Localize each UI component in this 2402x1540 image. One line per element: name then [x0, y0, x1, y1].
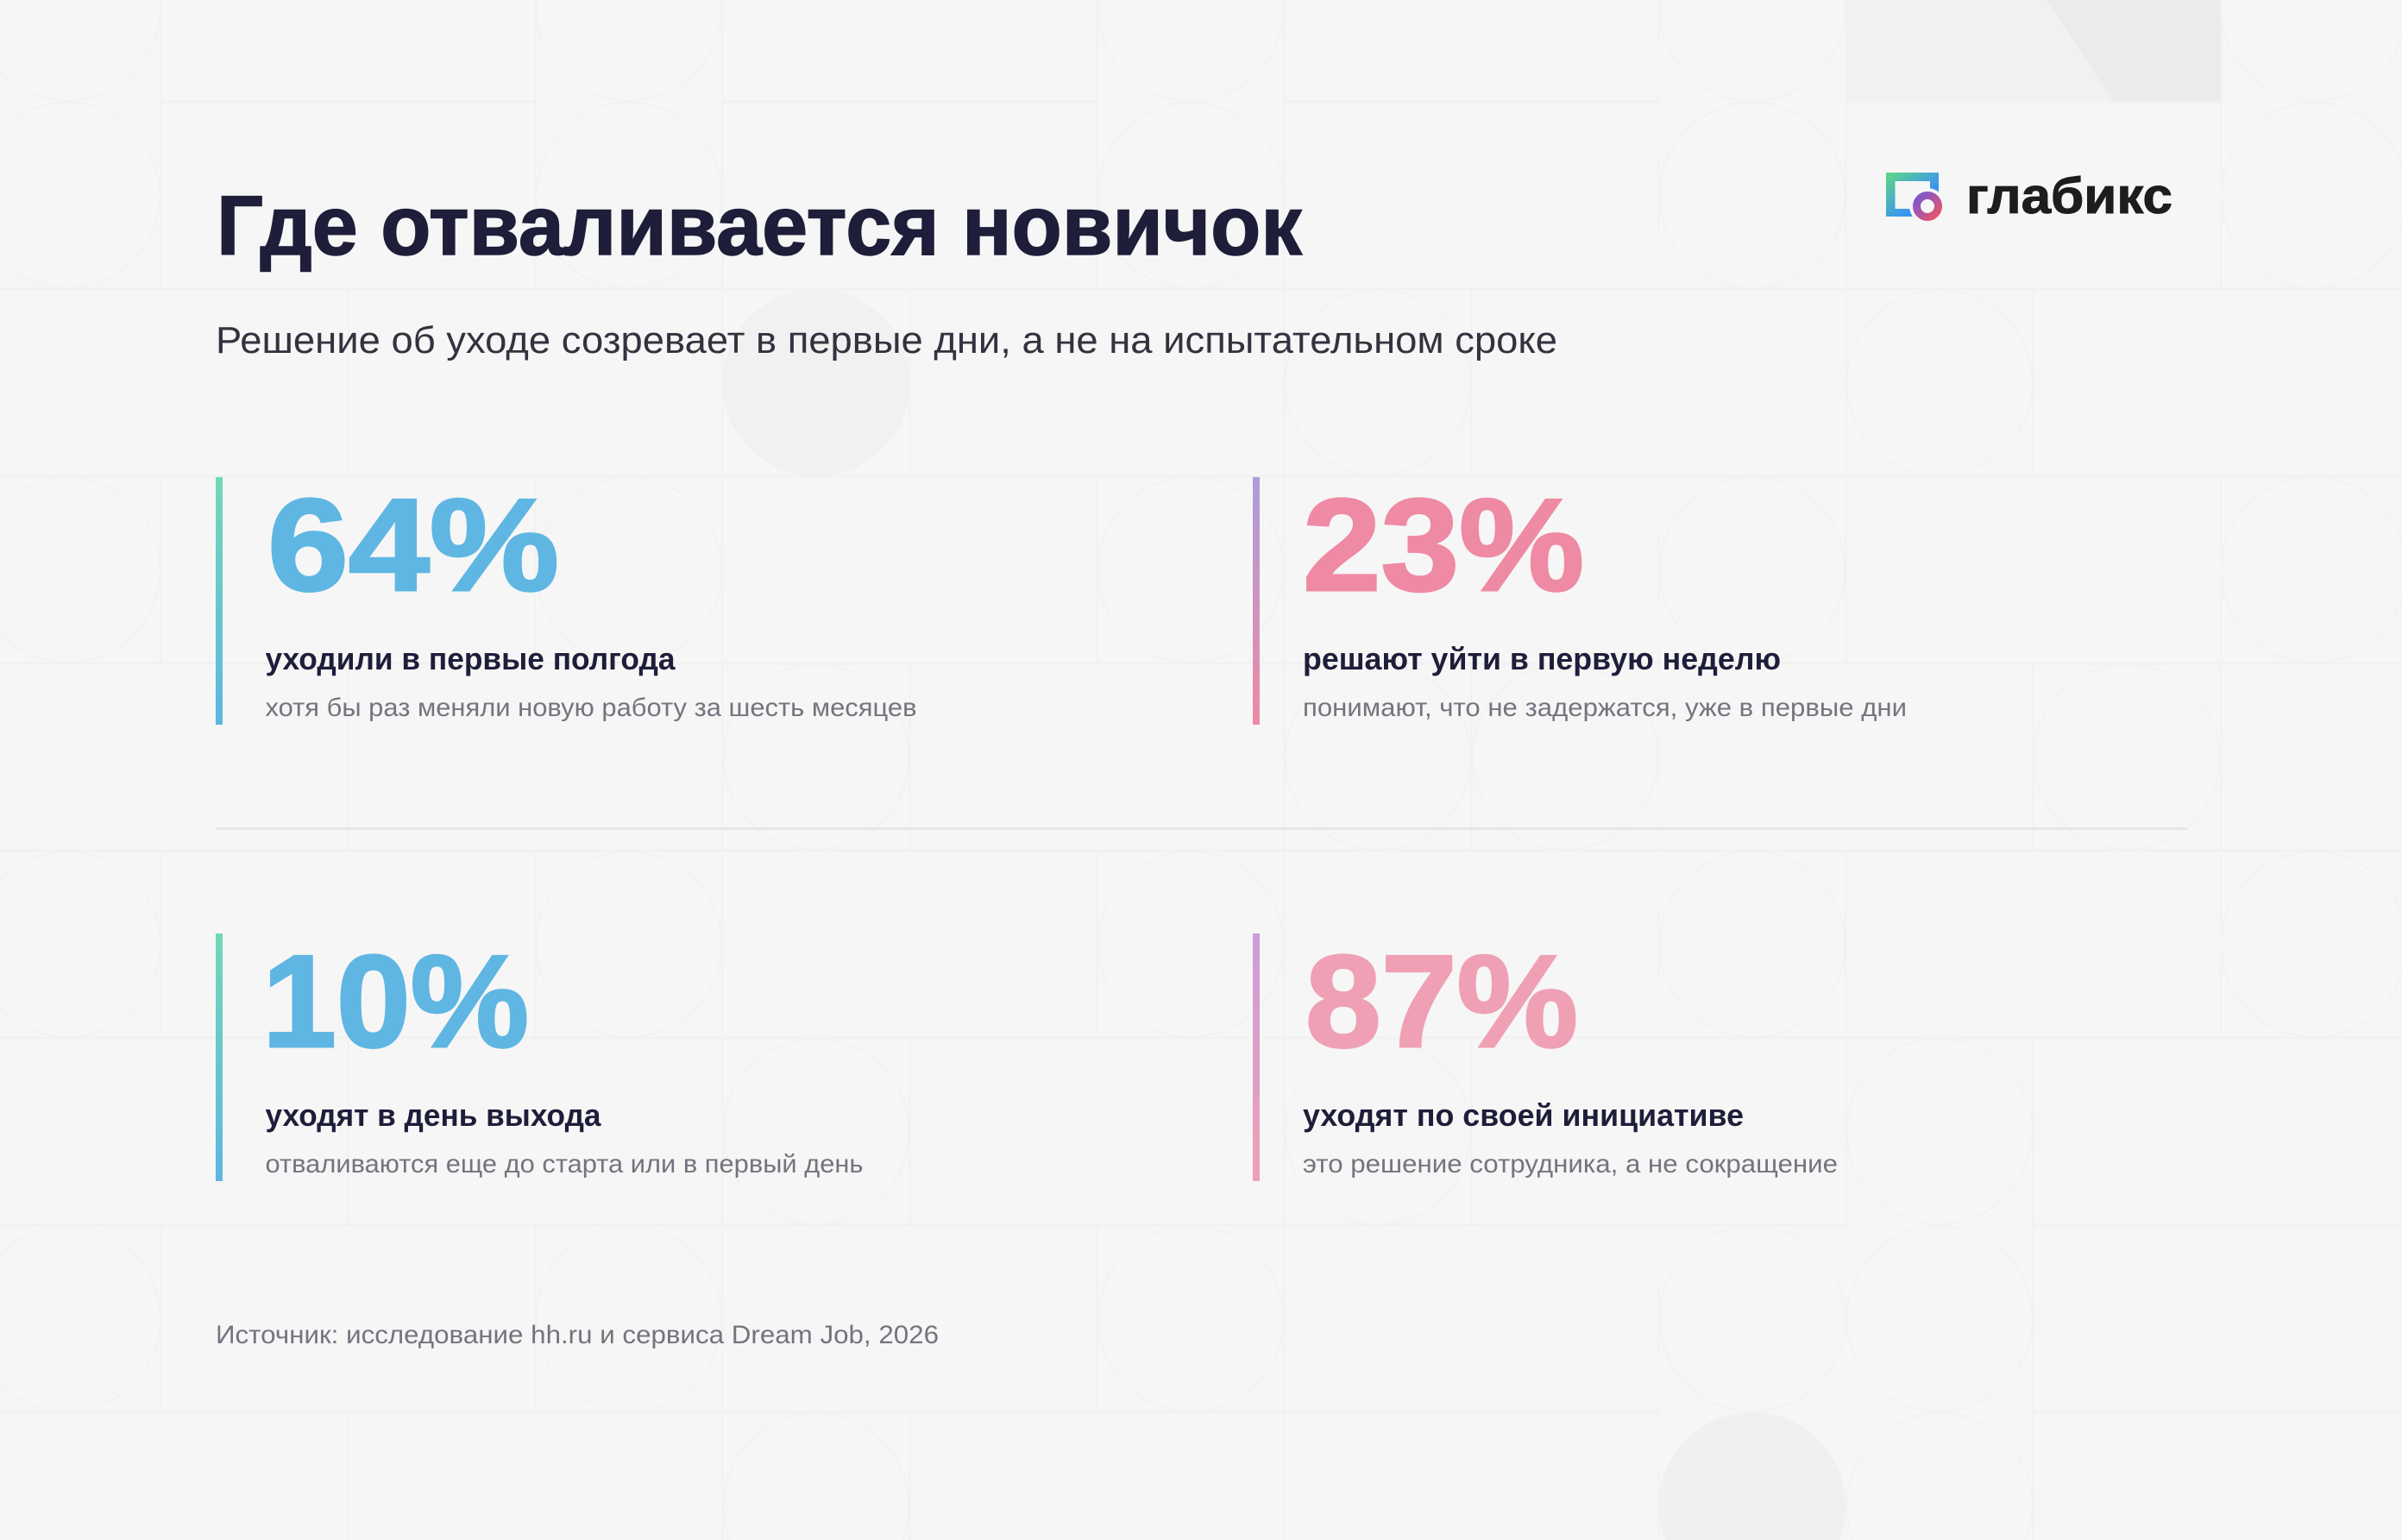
source note: Источник: исследование hh.ru и сервиса Dream Job, 2026	[216, 1321, 939, 1349]
subtitle: Решение об уходе созревает в первые дни, а не на испытательном сроке	[216, 319, 1557, 361]
stat block: 10%	[216, 928, 863, 1181]
stat number 23%: 23%	[1303, 472, 1584, 619]
stat heading: уходили в первые полгода	[266, 641, 676, 676]
stat number 87%: 87%	[1305, 928, 1578, 1075]
stat heading: уходят в день выхода	[266, 1097, 601, 1133]
stat heading: решают уйти в первую неделю	[1303, 641, 1781, 676]
logo: глабикс	[1886, 168, 2172, 224]
stat block: 23%	[1253, 472, 1907, 725]
stat heading: уходят по своей инициативе	[1303, 1097, 1744, 1133]
stat description: отваливаются еще до старта или в первый день	[266, 1150, 863, 1179]
icon: logo mark	[1886, 173, 1946, 224]
stat block: 87%	[1253, 928, 1838, 1181]
stat description: хотя бы раз меняли новую работу за шесть месяцев	[266, 694, 916, 722]
stat number 64%: 64%	[267, 472, 559, 619]
logo wordmark: глабикс	[1966, 168, 2172, 224]
stat description: это решение сотрудника, а не сокращение	[1303, 1150, 1838, 1179]
stat number 10%: 10%	[262, 928, 529, 1075]
stat block: 64%	[216, 472, 916, 725]
stat description: понимают, что не задержатся, уже в первые дни	[1303, 694, 1907, 722]
title: Где отваливается новичок	[217, 179, 1302, 273]
divider	[216, 827, 2187, 830]
